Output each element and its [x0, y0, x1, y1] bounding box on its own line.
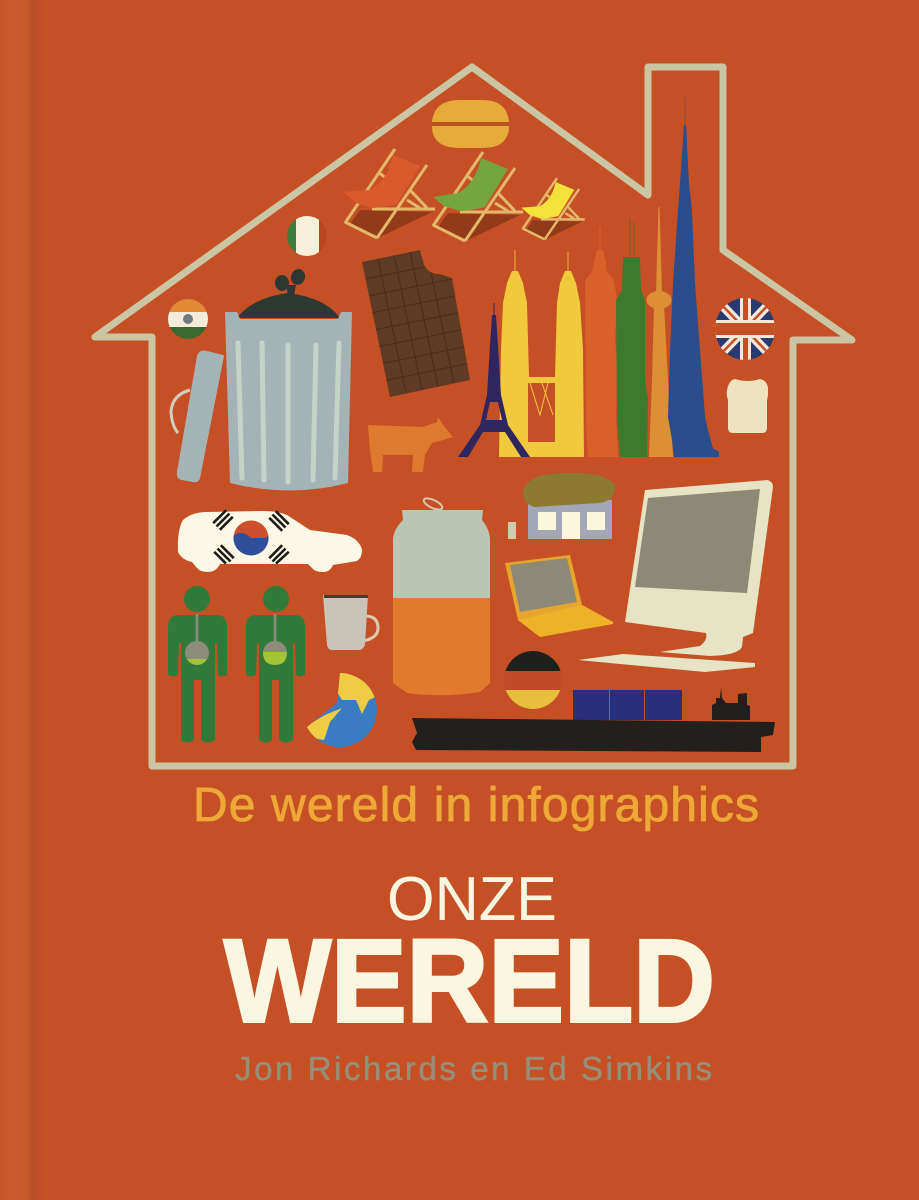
series title: De wereld in infographics	[193, 779, 759, 832]
Korean taegeuk	[233, 520, 269, 556]
icon: UK flag	[715, 298, 775, 360]
house outline	[95, 67, 852, 766]
spine band	[0, 0, 46, 1200]
icon: Indian flag	[168, 299, 208, 339]
title: ONZE: ONZE	[387, 865, 557, 934]
icon: Italian flag	[287, 215, 327, 257]
icon: cow	[368, 417, 453, 472]
garbage bag	[237, 267, 340, 318]
icon: deck chair yellow	[521, 178, 585, 239]
icon: chocolate bar	[362, 248, 470, 397]
icon: coffee mug	[323, 595, 378, 650]
icon: person right	[246, 586, 305, 742]
authors: Jon Richards en Ed Simkins	[235, 1050, 712, 1087]
icon: trash can	[171, 267, 352, 490]
icon: Eiffel tower	[458, 303, 530, 457]
lid	[178, 352, 223, 481]
icon: CN tower	[646, 207, 673, 457]
can body	[225, 312, 352, 490]
icon: laptop	[505, 555, 613, 637]
icon: German flag	[504, 651, 562, 710]
icon: container ship	[412, 687, 775, 752]
icon: Petronas towers	[499, 250, 584, 457]
icon: person left	[168, 586, 227, 742]
icon: drink can	[393, 496, 490, 695]
lid handle	[171, 390, 190, 433]
can ring	[422, 496, 444, 512]
trigrams	[213, 510, 289, 564]
icon: burger	[432, 100, 509, 148]
icon: desktop monitor	[578, 480, 773, 672]
icon: Taipei tower	[585, 227, 618, 457]
icon: deck chair orange	[343, 149, 435, 238]
icon: car with Korean flag	[178, 510, 362, 572]
icon: small house	[508, 473, 615, 539]
title: WERELD: WERELD	[224, 916, 715, 1048]
skyline	[458, 97, 719, 457]
icon: bread slice	[727, 379, 768, 433]
icon: deck chair green	[433, 152, 523, 241]
icon: globe	[305, 672, 380, 747]
keyboard	[578, 654, 755, 672]
icon: Burj Khalifa	[668, 97, 719, 457]
icon: Willis tower	[616, 218, 648, 457]
